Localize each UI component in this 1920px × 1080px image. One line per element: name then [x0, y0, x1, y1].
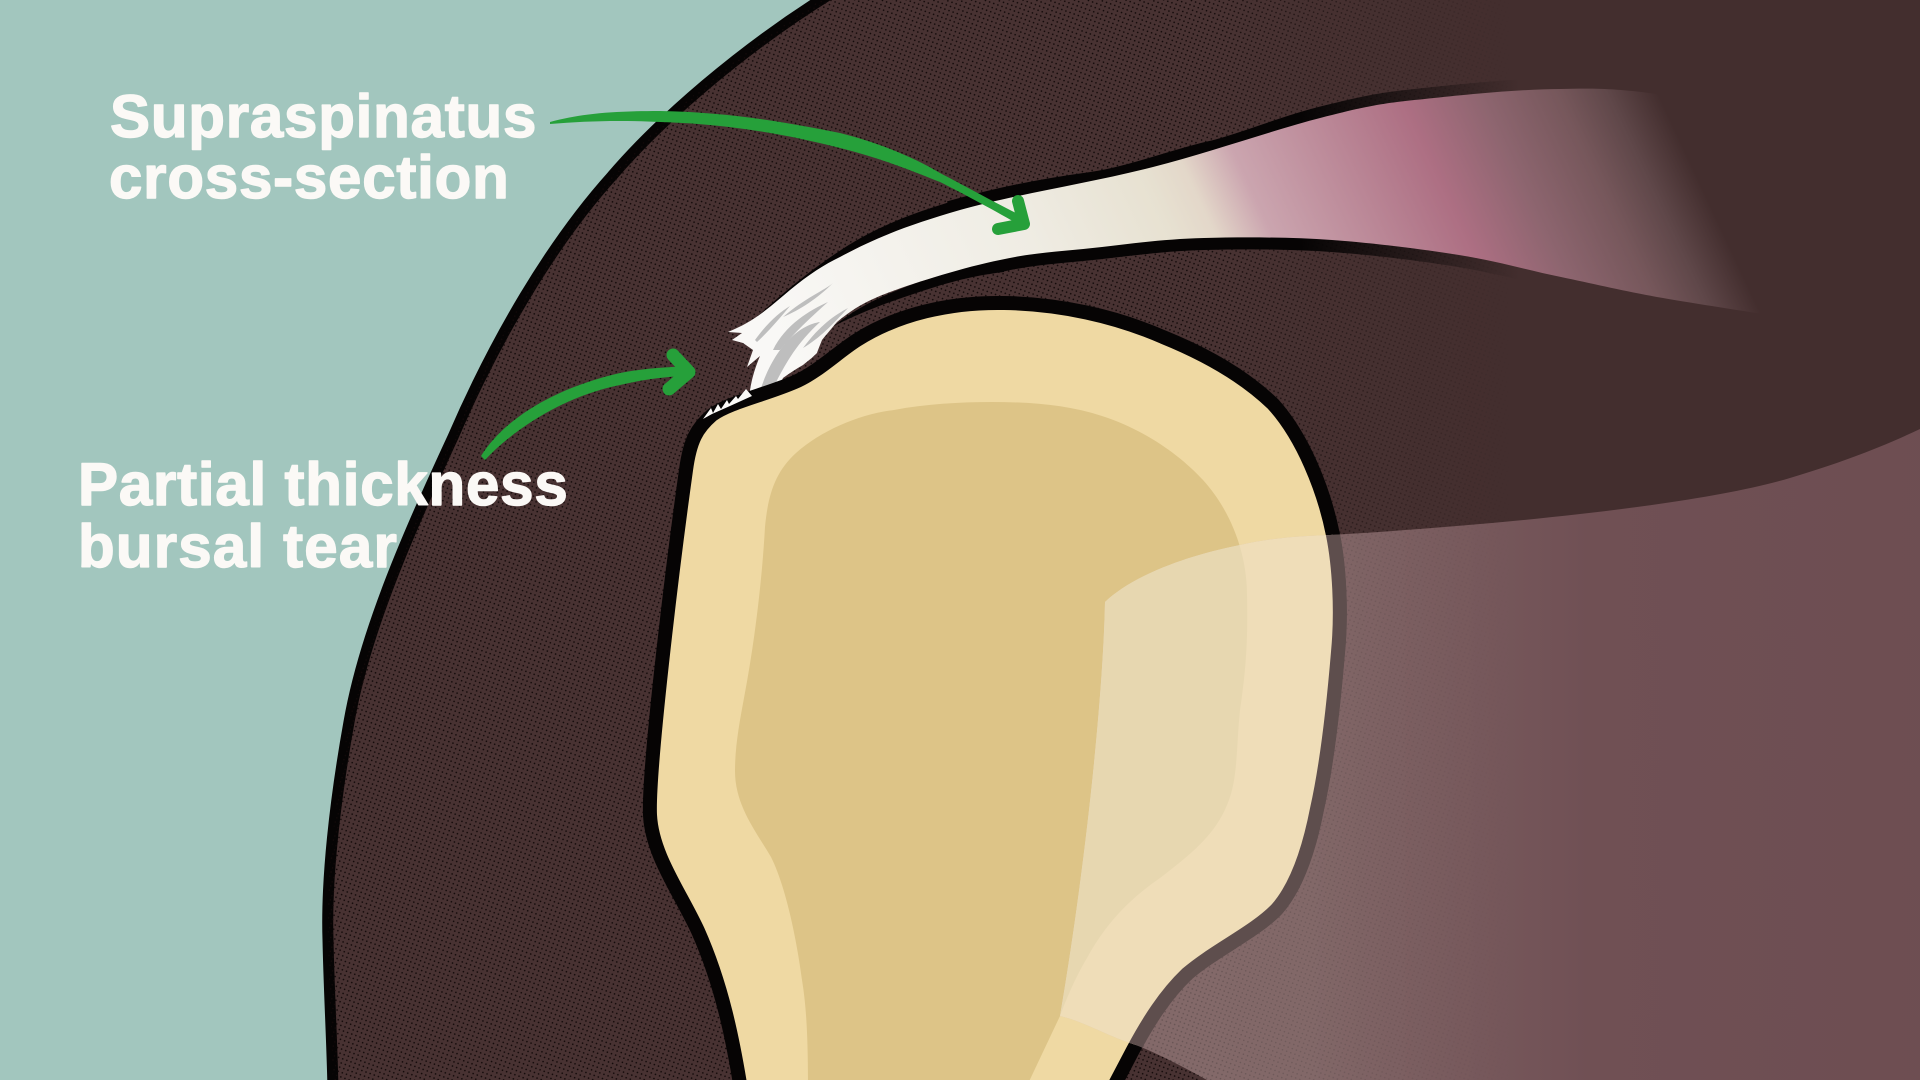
humeral head bone: [650, 303, 1340, 1080]
label: partial thickness bursal tear: bursal tear: [78, 513, 398, 580]
label: supraspinatus cross-section: Supraspinatus: [110, 83, 537, 150]
label: supraspinatus cross-section: cross-section: [109, 144, 510, 211]
torn tendon fibres: [755, 283, 848, 391]
arrow: supraspinatus: [550, 111, 1024, 229]
label: partial thickness bursal tear: Partial thickness: [78, 451, 568, 518]
supraspinatus tendon and muscle cross-section: [728, 89, 1800, 397]
label: supraspinatus cross-section: [109, 83, 537, 211]
arrow: partial tear: [481, 355, 692, 460]
frayed fringe of the tear: [703, 389, 752, 419]
inner bone marrow: [735, 402, 1247, 1080]
translucent deltoid overlay: [1060, 429, 1920, 1080]
label: partial thickness bursal tear: [78, 451, 568, 580]
